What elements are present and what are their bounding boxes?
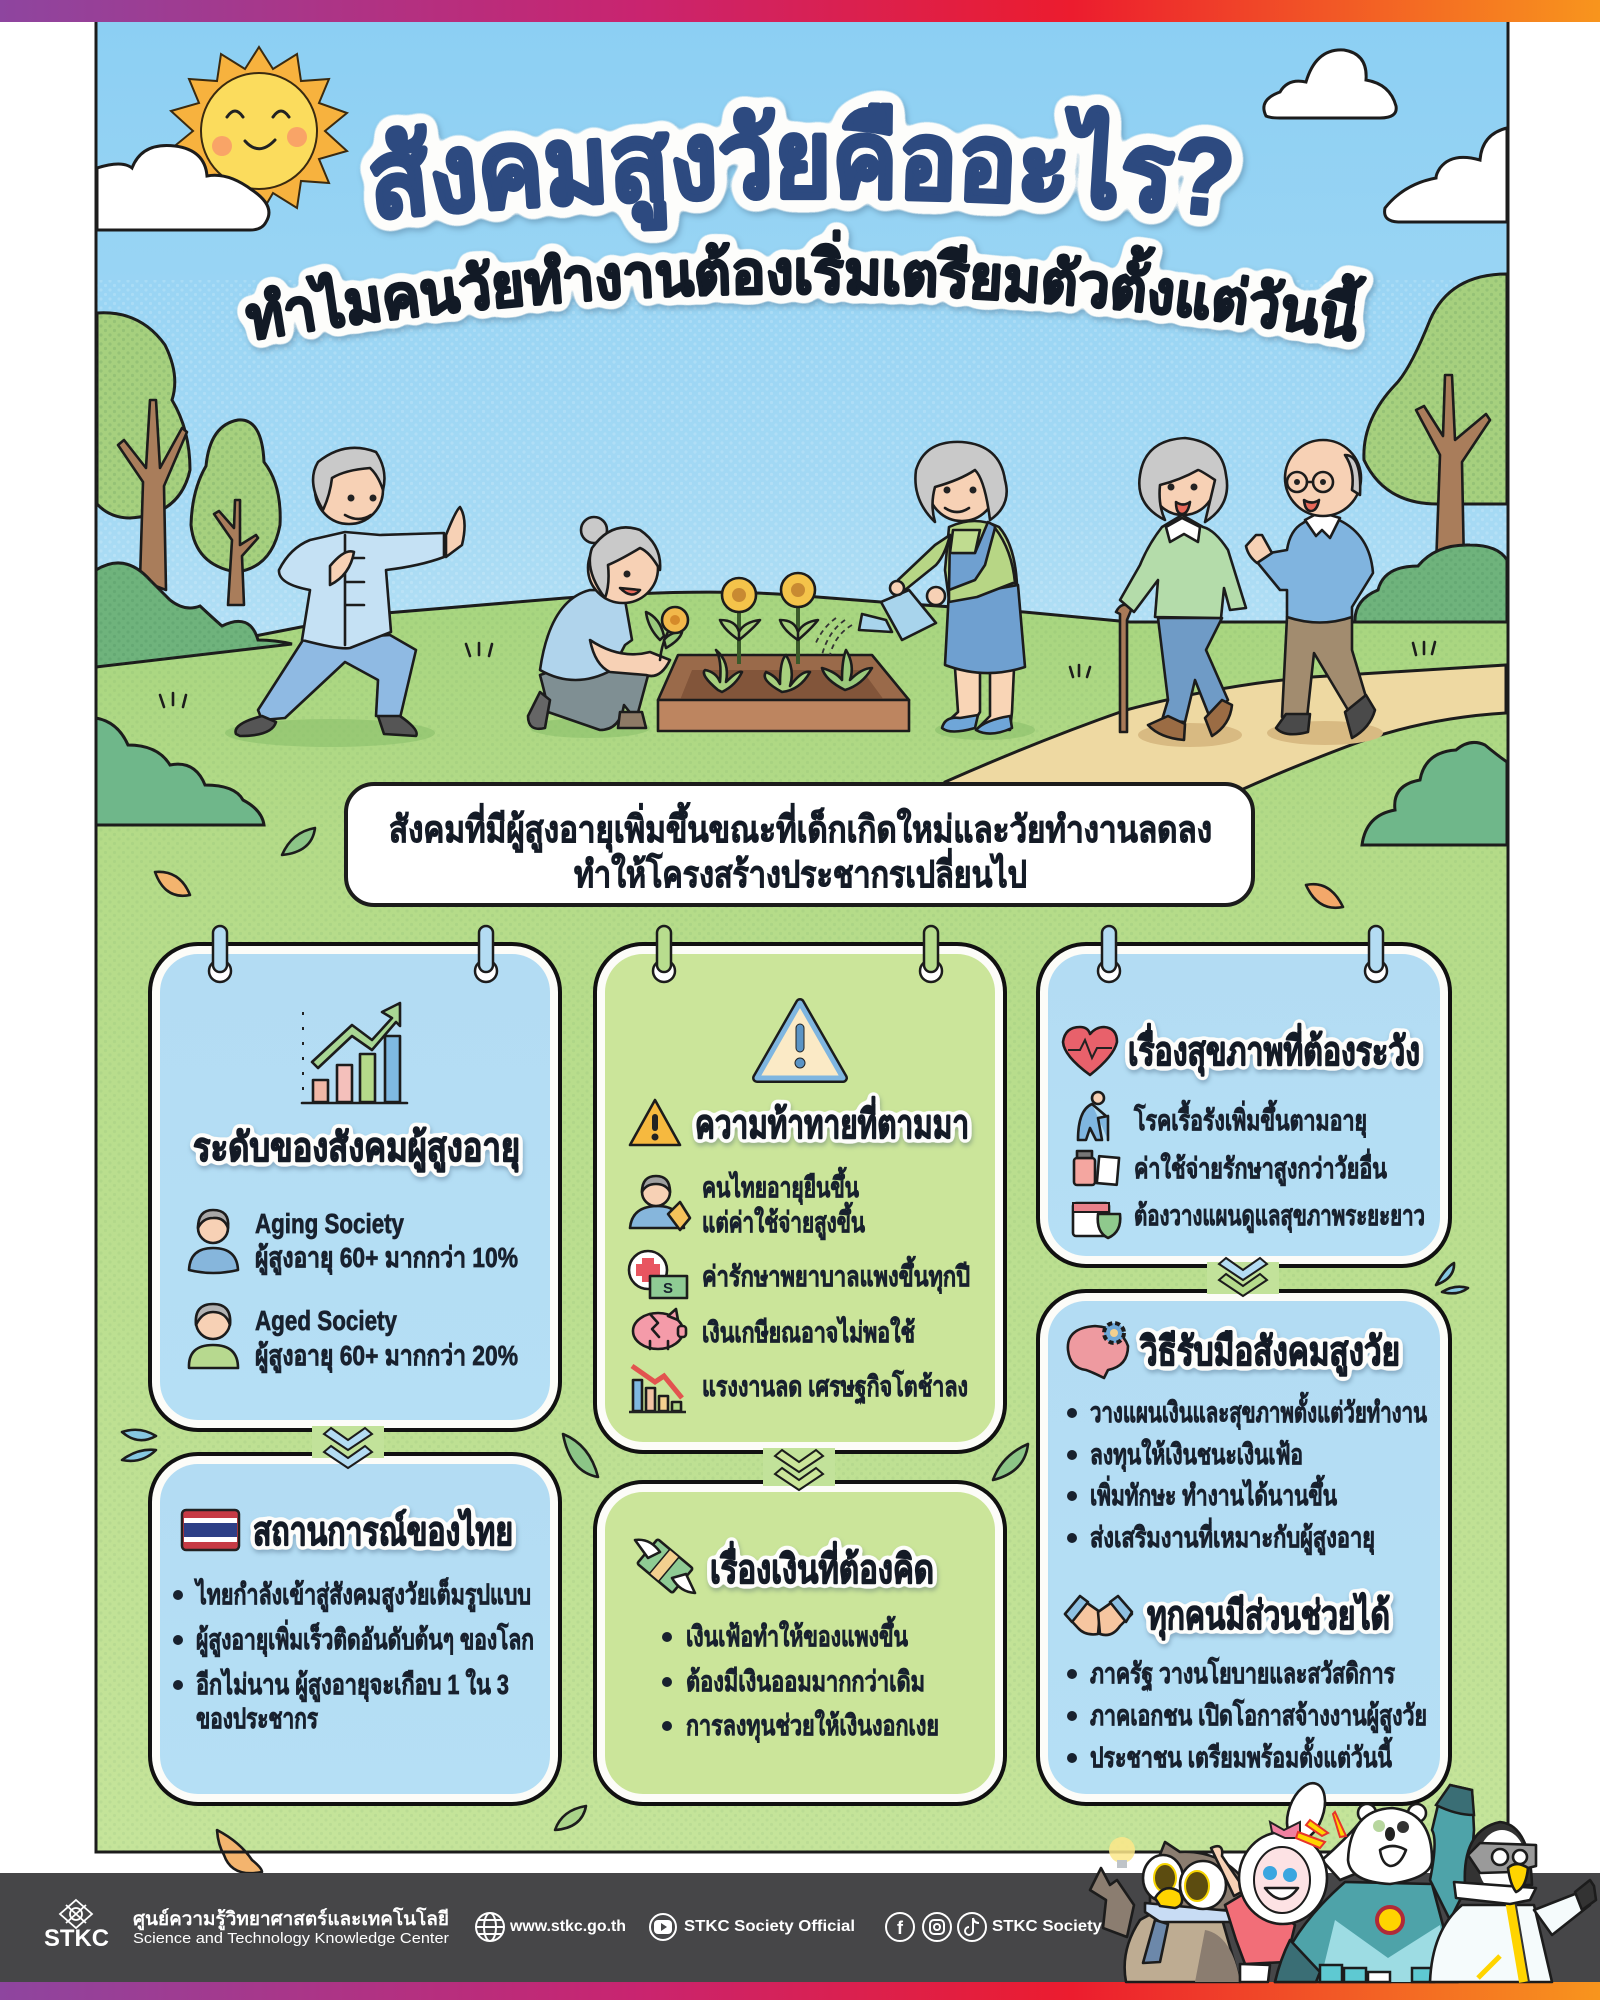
- sun: [171, 47, 347, 217]
- text: pension: เงินเกษียณอาจไม่พอใช้: [702, 1316, 915, 1348]
- bullet list: ภาคเอกชน เปิดโอกาสจ้างงานผู้สูงวัย: [1090, 1698, 1427, 1733]
- footer organisation name: [133, 1907, 449, 1947]
- flower in hand: [646, 607, 688, 660]
- icon: medical cost: S: [663, 1280, 673, 1297]
- footer logo: STKC: [44, 1925, 109, 1952]
- character: kneeling gardener: [528, 517, 670, 738]
- bullet list: [1067, 1391, 1427, 1555]
- callout definition: สังคมที่มีผู้สูงอายุเพิ่มขึ้นขณะที่เด็กเกิดใหม่และวัยทำงานลดลง: [389, 802, 1212, 853]
- icon: broken piggy bank: [633, 1309, 686, 1349]
- mascot: penguin in lab coat: [1430, 1822, 1596, 1982]
- text: aged society: Aged Society: [255, 1305, 397, 1336]
- footer website: [476, 1913, 626, 1941]
- mascot: lightbulb: [1109, 1837, 1135, 1868]
- character: tai chi man: [225, 448, 465, 747]
- bullet list: ภาครัฐ วางนโยบายและสวัสดิการ: [1090, 1656, 1395, 1692]
- panel: เรื่องสุขภาพที่ต้องระวัง: [1038, 926, 1450, 1266]
- icon: grandma: [189, 1304, 238, 1368]
- icon: rings panel 2: [653, 926, 942, 982]
- bullet list: ส่งเสริมงานที่เหมาะกับผู้สูงอายุ: [1090, 1517, 1375, 1555]
- bullet list: การลงทุนช่วยให้เงินงอกเงย: [686, 1709, 939, 1743]
- footer social icons: [886, 1913, 986, 1941]
- title: สังคมสูงวัยคืออะไร?: [360, 90, 1248, 249]
- arrow: column 1 chevrons: [312, 1426, 384, 1468]
- scattered leaves: [122, 828, 1468, 1873]
- footer youtube: [650, 1914, 855, 1940]
- footer gradient bar: [0, 1982, 1600, 2000]
- top gradient bar: [0, 0, 1600, 22]
- subtitle: ทำไมคนวัยทำงานต้องเริ่มเตรียมตัวตั้งแต่วันนี้: [236, 222, 1378, 355]
- text: aged society: ผู้สูงอายุ 60+ มากกว่า 20%: [255, 1340, 518, 1373]
- icon: handshake: [1065, 1596, 1132, 1635]
- mascot: owl: [1090, 1842, 1244, 1982]
- text: longer life: แต่ค่าใช้จ่ายสูงขึ้น: [702, 1201, 865, 1240]
- heading: ระดับของสังคมผู้สูงอายุ: [193, 1126, 520, 1173]
- mascot: rabbit hoodie: [1211, 1778, 1370, 1982]
- ground: grass hill: [96, 592, 1508, 1852]
- bullet list: [1067, 1656, 1427, 1773]
- heading: สถานการณ์ของไทย: [253, 1508, 513, 1554]
- icon: flying money: [635, 1539, 695, 1593]
- icon: falling chart: [629, 1366, 686, 1412]
- icon: person with price tag: [630, 1176, 690, 1230]
- footer website: www.stkc.go.th: [509, 1918, 626, 1935]
- text: longer life: [702, 1166, 865, 1240]
- text: aged society: [255, 1305, 518, 1373]
- character: woman with watering can: [815, 442, 1035, 740]
- text: medical cost: ค่ารักษาพยาบาลแพงขึ้นทุกปี: [702, 1255, 970, 1294]
- heading: เรื่องเงินที่ต้องคิด: [710, 1541, 934, 1592]
- footer organisation name: ศูนย์ความรู้วิทยาศาสตร์และเทคโนโลยี: [133, 1907, 449, 1931]
- footer social icons: f: [897, 1918, 904, 1938]
- bullet list: ต้องมีเงินออมมากกว่าเดิม: [686, 1666, 925, 1697]
- icon: rising bar chart: [302, 1003, 407, 1103]
- arrow: column 2 chevrons: [763, 1448, 835, 1490]
- footer youtube: STKC Society Official: [684, 1918, 855, 1935]
- scene background: sky: [96, 22, 1508, 822]
- bullet list: ไทยกำลังเข้าสู่สังคมสูงวัยเต็มรูปแบบ: [194, 1577, 531, 1612]
- text: chronic disease: โรคเรื้อรังเพิ่มขึ้นตามอายุ: [1133, 1099, 1367, 1138]
- icon: person gray hair: [189, 1210, 238, 1273]
- icon: elder with cane: [1078, 1092, 1108, 1140]
- mascot: teal polar bear: [1275, 1785, 1474, 1982]
- bullet list: อีกไม่นาน ผู้สูงอายุจะเกือบ 1 ใน 3: [196, 1668, 509, 1702]
- bullet list: ลงทุนให้เงินชนะเงินเฟ้อ: [1090, 1438, 1303, 1472]
- bullet list: เงินเฟ้อทำให้ของแพงขึ้น: [686, 1615, 908, 1652]
- character: man with glasses: [1246, 440, 1383, 745]
- heading: ทุกคนมีส่วนช่วยได้: [1147, 1592, 1390, 1641]
- panel: ความท้าทายที่ตามมา: [595, 926, 1005, 1452]
- grass tufts: [160, 642, 1435, 707]
- icon: heart pulse: [1063, 1027, 1117, 1075]
- icon: big warning triangle: [757, 1003, 843, 1078]
- character: woman with cane: [1116, 438, 1246, 747]
- text: longer life: คนไทยอายุยืนขึ้น: [702, 1166, 859, 1205]
- callout definition: [346, 784, 1253, 905]
- text: long term plan: ต้องวางแผนดูแลสุขภาพระยะยาว: [1134, 1200, 1425, 1233]
- icon: medicine and document: [1074, 1151, 1119, 1185]
- heading: วิธีรับมือสังคมสูงวัย: [1140, 1330, 1400, 1376]
- panel: สถานการณ์ของไทย: [150, 1454, 560, 1804]
- panel: ระดับของสังคมผู้สูงอายุ: [150, 926, 560, 1430]
- icon: rings panel 1: [209, 926, 497, 982]
- bullet list: ผู้สูงอายุเพิ่มเร็วติดอันดับต้นๆ ของโลก: [196, 1619, 534, 1657]
- bush bottom left: [96, 718, 264, 825]
- text: workforce: แรงงานลด เศรษฐกิจโตช้าลง: [702, 1369, 968, 1405]
- right tree: [1364, 274, 1507, 567]
- panel: เรื่องเงินที่ต้องคิด: [595, 1482, 1005, 1804]
- text: aging society: Aging Society: [255, 1208, 404, 1239]
- icon: medical cost: [629, 1251, 687, 1298]
- icon: thai flag: [182, 1510, 239, 1550]
- footer band: [0, 1873, 1600, 1982]
- clouds: [97, 50, 1507, 230]
- heading: ความท้าทายที่ตามมา: [695, 1096, 969, 1147]
- icon: brain and gear: [1068, 1323, 1128, 1378]
- sandy path: [930, 665, 1506, 800]
- text: aging society: ผู้สูงอายุ 60+ มากกว่า 10%: [255, 1242, 518, 1275]
- icon: small warning triangle: [630, 1100, 680, 1145]
- raised garden box: [658, 573, 909, 731]
- icon: rings panel 3: [1098, 926, 1387, 982]
- heading: เรื่องสุขภาพที่ต้องระวัง: [1128, 1023, 1420, 1077]
- panel: วิธีรับมือสังคมสูงวัย: [1038, 1291, 1450, 1804]
- bullet list: [662, 1615, 939, 1743]
- left trees: [97, 313, 280, 605]
- callout definition: ทำให้โครงสร้างประชากรเปลี่ยนไป: [574, 848, 1027, 895]
- footer organisation name: Science and Technology Knowledge Center: [133, 1930, 449, 1947]
- bullet list: วางแผนเงินและสุขภาพตั้งแต่วัยทำงาน: [1090, 1391, 1427, 1430]
- bullet list: ของประชากร: [196, 1703, 318, 1734]
- bush bottom right: [1362, 742, 1507, 845]
- icon: calendar and shield: [1073, 1203, 1120, 1238]
- arrow: column 3 chevrons: [1207, 1258, 1279, 1296]
- bullet list: ประชาชน เตรียมพร้อมตั้งแต่วันนี้: [1090, 1736, 1393, 1773]
- text: aging society: [255, 1208, 518, 1275]
- bullet list: เพิ่มทักษะ ทำงานได้นานขึ้น: [1090, 1474, 1337, 1511]
- text: medical expense: ค่าใช้จ่ายรักษาสูงกว่าวัยอื่น: [1134, 1148, 1387, 1186]
- bushes behind hill: [96, 545, 1507, 667]
- bullet list: [173, 1577, 534, 1734]
- footer logo: [44, 1900, 109, 1952]
- footer social handle text: STKC Society: [992, 1918, 1102, 1935]
